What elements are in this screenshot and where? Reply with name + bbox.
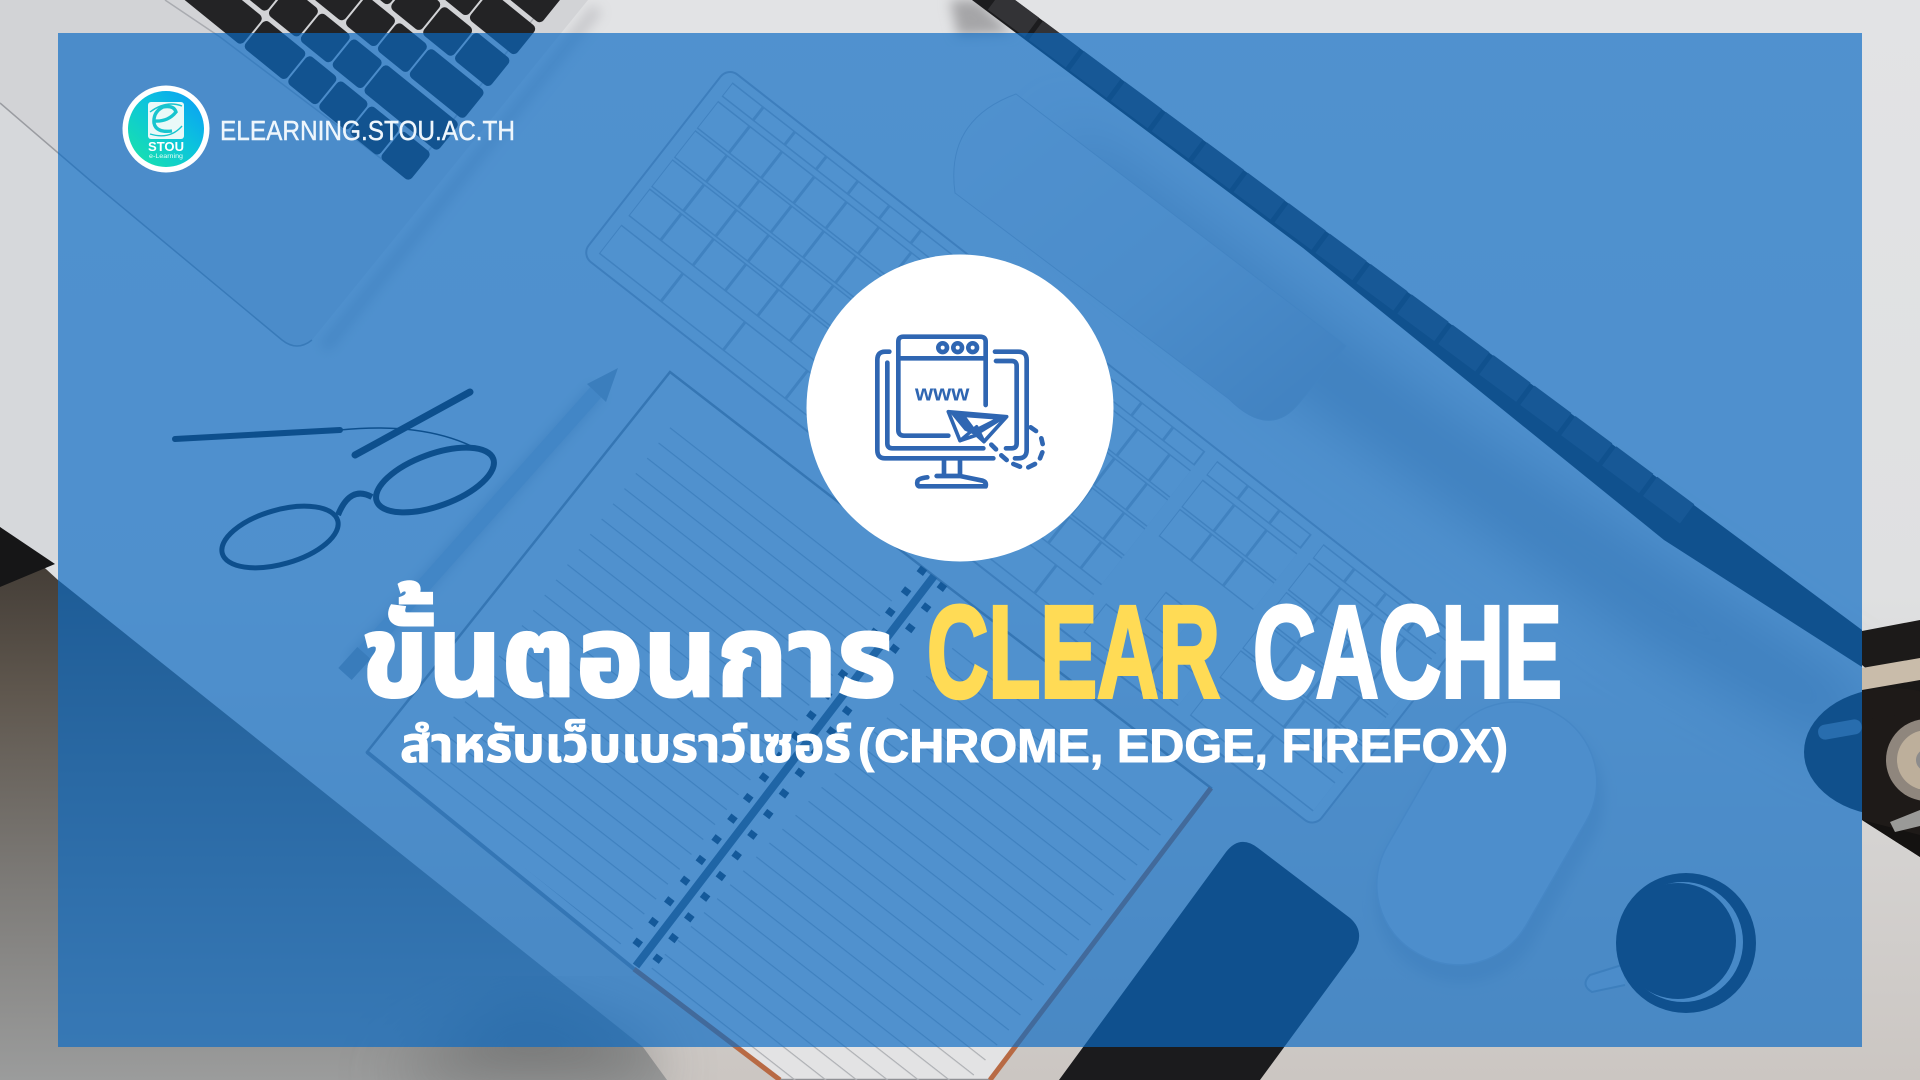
- icon: monitor browser paper plane: www: [914, 381, 970, 406]
- glasses: [175, 392, 502, 579]
- white circle with website icon: [806, 254, 1114, 562]
- icon: monitor browser paper plane: [877, 337, 1043, 486]
- laptop: [0, 0, 602, 352]
- site url: ELEARNING.STOU.AC.TH: [220, 115, 515, 146]
- phone: [1059, 842, 1359, 1080]
- monitor foot: [954, 94, 1346, 420]
- coffee cup: [1585, 873, 1756, 1013]
- subtitle: สำหรับเว็บเบราว์เซอร์: [400, 717, 852, 773]
- dark lower-left desk shadow: [0, 527, 667, 1080]
- pencil: [345, 368, 618, 674]
- subtitle: [400, 717, 1508, 773]
- logo wordmark: STOU: [148, 139, 184, 154]
- mouse: [1344, 673, 1635, 1014]
- notebook: [367, 372, 1211, 1080]
- monitor shadow: [1060, 120, 1860, 760]
- notebook spiral: [626, 568, 944, 974]
- title: [361, 578, 1562, 725]
- title: CLEAR: [927, 578, 1220, 725]
- wireless keyboard: [581, 67, 1461, 827]
- logo tagline: e-Learning: [149, 154, 183, 160]
- title: CACHE: [1253, 578, 1562, 725]
- title: ขั้นตอนการ: [361, 581, 896, 721]
- camera: [1804, 620, 1920, 857]
- subtitle: (CHROME, EDGE, FIREFOX): [858, 719, 1508, 772]
- logo emblem: [148, 102, 184, 139]
- logo badge: [122, 86, 210, 172]
- monitor edge band: [950, 0, 1862, 667]
- laptop keys: [160, 0, 563, 184]
